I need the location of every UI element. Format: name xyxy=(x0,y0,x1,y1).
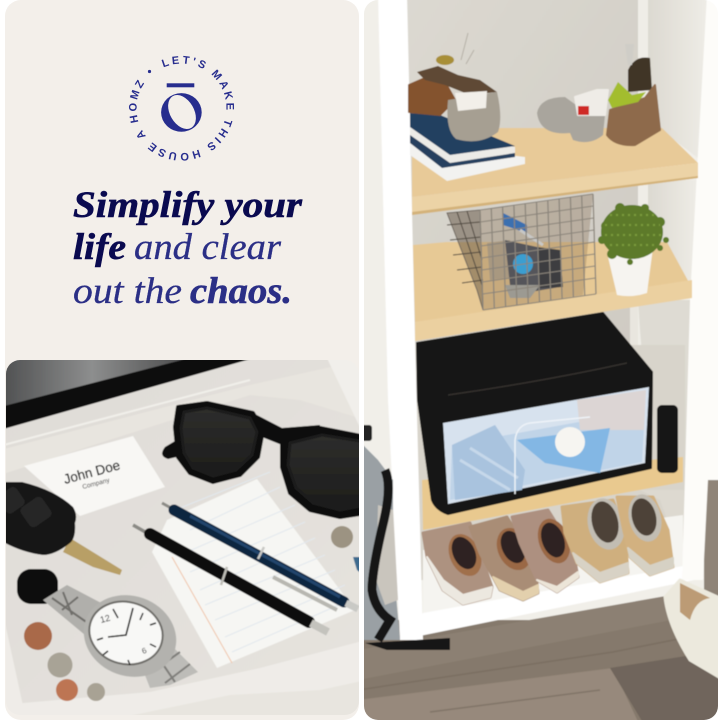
black pen xyxy=(133,525,328,632)
red tag xyxy=(578,106,589,115)
shoe 3 xyxy=(512,510,578,592)
dial six: 6 xyxy=(141,646,148,656)
key blade xyxy=(63,538,122,575)
drawer unit top seam xyxy=(448,363,627,395)
card company: Company xyxy=(82,477,111,491)
clear drawer front xyxy=(443,387,649,504)
business card xyxy=(24,436,165,516)
backpack buckle xyxy=(360,425,372,441)
white roll xyxy=(555,427,585,457)
books xyxy=(410,113,525,181)
drawer lower well xyxy=(450,410,645,500)
drawer handle xyxy=(515,417,590,494)
grey jug xyxy=(537,97,605,142)
frame right xyxy=(282,428,366,517)
backpack xyxy=(358,425,450,650)
tray front lip xyxy=(23,642,359,715)
left temple xyxy=(162,440,177,460)
frame bridge xyxy=(253,413,320,445)
watch strap pebble xyxy=(17,569,58,604)
logo bar xyxy=(167,83,194,87)
watch case xyxy=(84,594,177,678)
basket side xyxy=(447,210,483,310)
drawer gloves xyxy=(452,425,525,500)
green item xyxy=(608,82,646,108)
shoe 5 xyxy=(617,491,673,575)
right divider xyxy=(638,0,648,345)
potted plant xyxy=(598,203,669,296)
drawer mask xyxy=(517,428,610,473)
dial twelve: 12 xyxy=(99,613,111,625)
grey opening reflection xyxy=(6,360,184,406)
right lens xyxy=(288,435,366,510)
right inner side xyxy=(648,0,692,152)
wire basket xyxy=(447,194,596,310)
panel: organised tray photo xyxy=(0,354,366,720)
top shelf xyxy=(412,128,698,215)
silver tool xyxy=(625,44,634,65)
title xyxy=(73,185,303,312)
basket contents xyxy=(487,213,563,298)
dark opening xyxy=(6,360,249,429)
card name: John Doe xyxy=(62,457,122,487)
flashlight xyxy=(657,405,678,473)
shoe 4 xyxy=(562,494,630,582)
cabinet lower back xyxy=(415,345,685,580)
title line 1: Simplify your xyxy=(73,185,303,226)
basket wire grid xyxy=(480,194,596,310)
watch dial xyxy=(88,600,164,666)
back wall xyxy=(407,0,638,345)
dark object xyxy=(628,58,652,92)
key fob xyxy=(0,482,76,555)
car key xyxy=(0,482,122,575)
watch strap top xyxy=(43,585,105,635)
basket interior xyxy=(480,194,593,310)
notepad xyxy=(152,472,355,668)
cabinet right post xyxy=(682,0,720,580)
watch hands xyxy=(108,608,133,637)
blue clip xyxy=(352,556,359,572)
cream loafer xyxy=(665,580,720,680)
logo dot xyxy=(148,70,151,73)
frame left xyxy=(175,403,263,482)
logo letter O xyxy=(161,90,202,134)
logo ring text: LET'S MAKE THIS HOUSE A HOMZ xyxy=(128,56,234,161)
panel: headline background xyxy=(5,0,359,720)
drawer upper right tint xyxy=(577,390,646,430)
cabinet left post xyxy=(378,0,423,640)
bottom shelf xyxy=(422,457,683,530)
shoe 2 xyxy=(470,517,538,600)
stone pot xyxy=(447,92,500,141)
watch strap bottom xyxy=(143,647,198,688)
blue pen xyxy=(162,503,358,610)
plant foliage xyxy=(598,203,669,265)
panel: shelving unit photo xyxy=(358,0,720,720)
title line 3 regular: out the xyxy=(73,271,182,312)
coins xyxy=(24,526,353,701)
pot label xyxy=(455,91,487,111)
dried arrangement xyxy=(409,33,497,115)
tray left rim xyxy=(6,630,22,704)
plant pot xyxy=(608,248,653,296)
black storage drawer xyxy=(417,313,652,514)
cabinet base floor xyxy=(423,515,683,615)
shoes xyxy=(423,491,673,604)
margin line xyxy=(172,557,232,663)
tray back rim xyxy=(24,402,206,465)
drawer unit body xyxy=(417,313,652,514)
middle shelf xyxy=(413,242,692,341)
title line 2 bold: life xyxy=(73,227,126,268)
floor xyxy=(364,620,686,720)
cabinet base front xyxy=(400,566,704,640)
backpack strap xyxy=(365,638,450,650)
logo badge xyxy=(128,56,234,161)
shoe 1 xyxy=(423,523,492,604)
title line 2 regular: and clear xyxy=(134,227,282,268)
cork basket xyxy=(607,85,660,145)
sunglasses xyxy=(162,403,366,517)
wristwatch xyxy=(17,569,198,690)
white roll xyxy=(575,90,608,115)
left lens xyxy=(181,408,257,476)
tray right wall xyxy=(328,360,359,425)
title line 3 bold: chaos. xyxy=(190,271,292,312)
